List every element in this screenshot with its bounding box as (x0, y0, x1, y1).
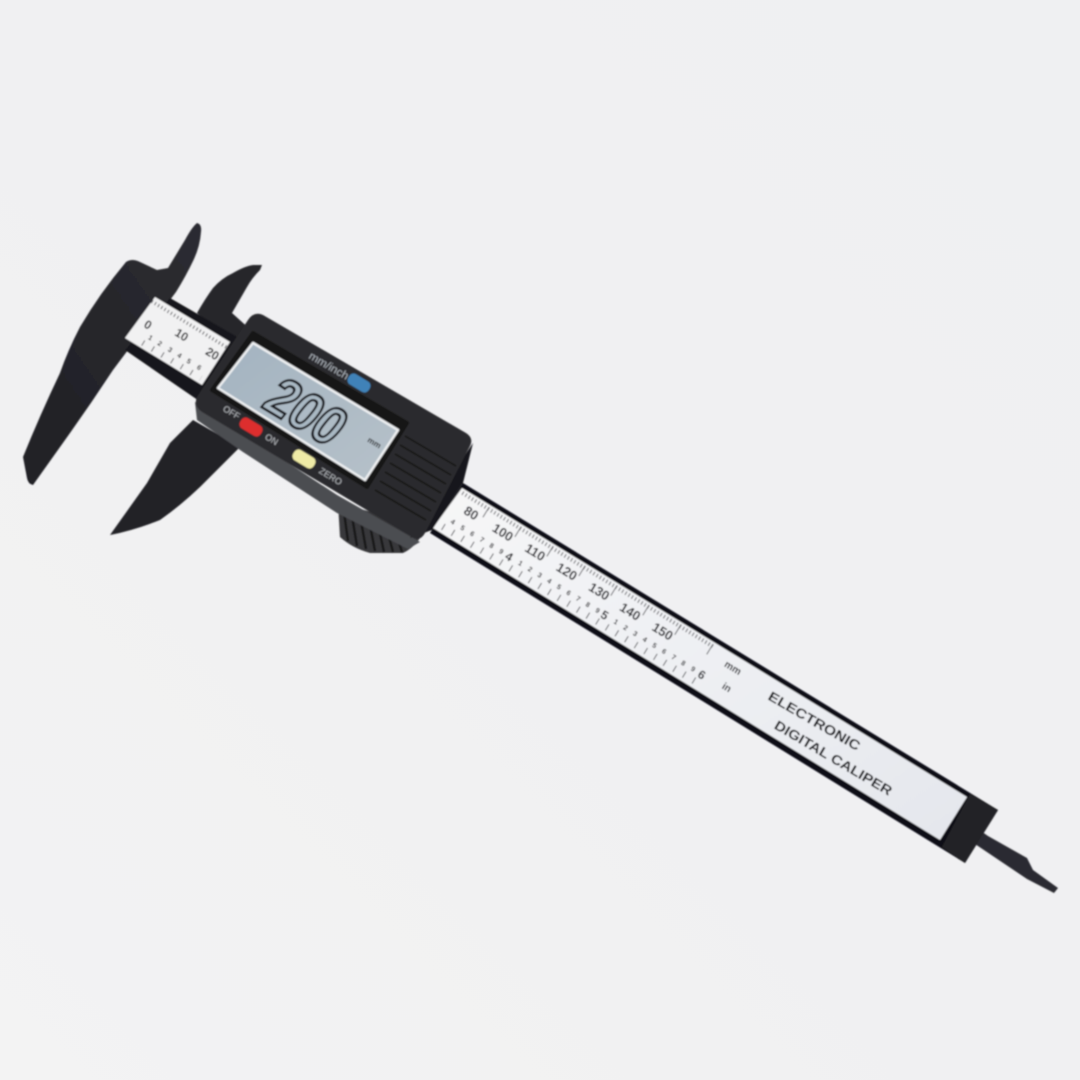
right scale markings (442, 493, 745, 699)
product name (765, 689, 895, 799)
left scale markings (131, 301, 227, 381)
right scale markings: 6 (695, 667, 709, 683)
readout body (196, 314, 471, 539)
right scale markings: 123456789 (517, 560, 601, 615)
white scale strip left (125, 297, 230, 385)
thumb wheel (338, 503, 422, 553)
LCD screen (218, 343, 398, 480)
red button (238, 416, 264, 438)
right scale markings: 456789 (449, 519, 504, 556)
product name: DIGITAL CALIPER (772, 718, 895, 799)
ZERO label: ZERO (317, 466, 344, 487)
right scale markings: 123456789 (612, 619, 696, 674)
right scale markings: 4 (503, 549, 516, 565)
right scale markings: 130 (586, 579, 612, 603)
display bezel (212, 333, 407, 487)
right scale markings: mm (722, 659, 743, 678)
fixed jaw (23, 223, 201, 485)
rail end block (942, 794, 998, 863)
caliper (23, 223, 1058, 893)
right scale markings: 5 (598, 608, 611, 623)
LCD reading: 200 (252, 366, 361, 457)
rail collar (410, 443, 473, 538)
right scale markings: in (720, 681, 733, 695)
right scale markings: 120 (554, 559, 580, 584)
right scale markings: 100 (490, 520, 516, 544)
right scale markings: 140 (617, 600, 643, 624)
left scale markings: 10 (172, 326, 191, 345)
depth rod tip (972, 829, 1058, 893)
rail right section (430, 483, 998, 863)
ON label: ON (263, 432, 280, 447)
white scale strip right (433, 488, 967, 840)
blue button (346, 372, 372, 394)
rail left section (125, 297, 260, 405)
yellow button (291, 448, 317, 470)
grip ridges (375, 436, 456, 520)
OFF label: OFF (221, 404, 242, 422)
left scale markings: 20 (203, 344, 222, 363)
right scale markings: 110 (522, 540, 548, 564)
right scale markings: 150 (649, 619, 676, 644)
left scale markings: 0 (141, 317, 155, 333)
moving upper jaw (197, 265, 262, 350)
product name: ELECTRONIC (765, 689, 863, 754)
left scale markings: 123456 (147, 334, 202, 372)
mm/inch label: mm/inch (306, 350, 351, 383)
LCD unit: mm (366, 435, 383, 450)
moving lower jaw (110, 420, 240, 535)
body side face (195, 402, 420, 549)
right scale markings: 80 (461, 503, 481, 523)
